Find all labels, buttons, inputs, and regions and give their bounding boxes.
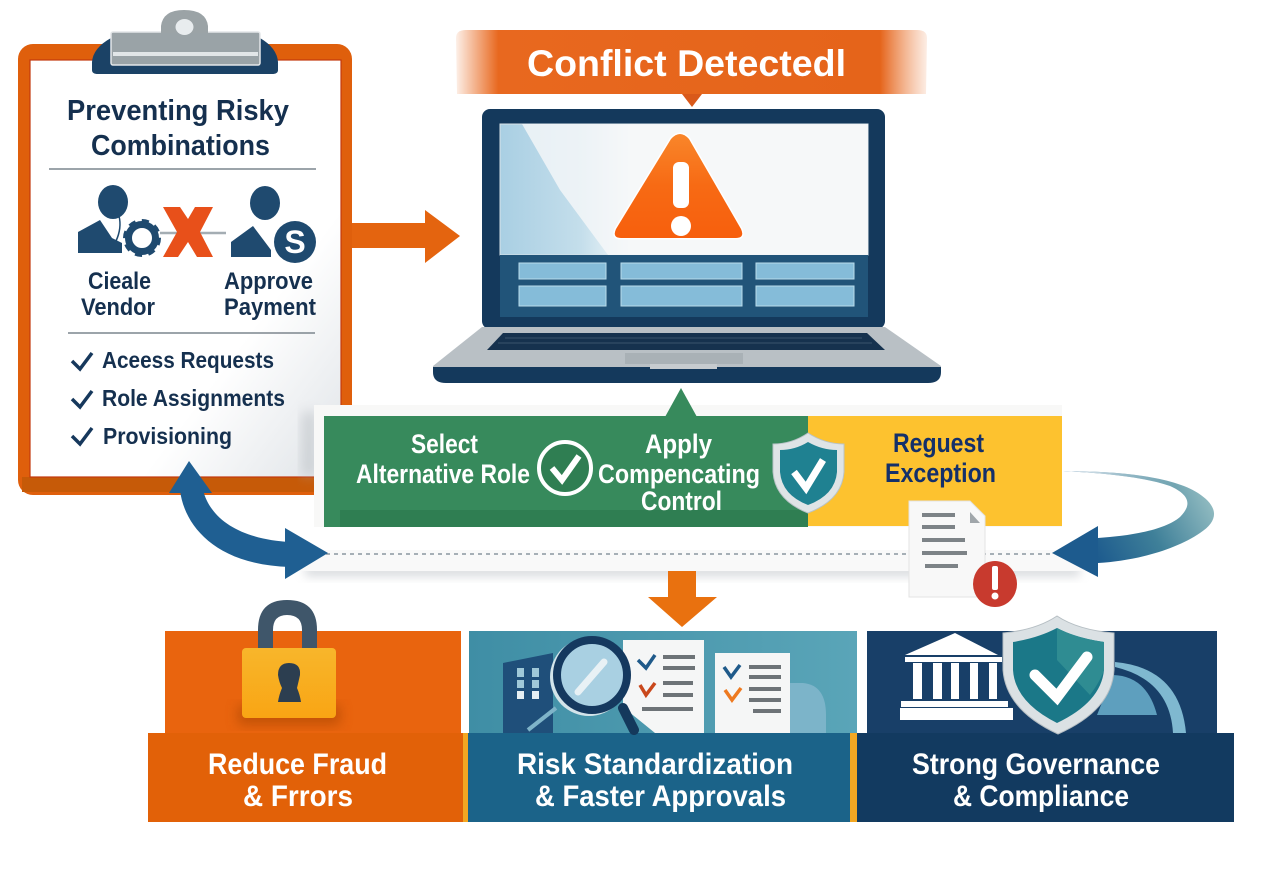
- option: green choices: Compencating: [598, 459, 760, 489]
- option: green choices: Control: [641, 486, 722, 516]
- option: request exception: Exception: [885, 458, 996, 488]
- screen cells: [519, 263, 854, 306]
- icon: small arch: [788, 683, 826, 733]
- option: green choices: Select: [411, 429, 478, 459]
- heading: preventing risky combinations: Preventing Risky: [67, 95, 289, 127]
- icon: document with alert: [909, 501, 1017, 607]
- text: risk standardization: [517, 748, 793, 813]
- option: request exception: Reguest: [893, 428, 984, 458]
- icon: dome: [1097, 675, 1157, 715]
- icon: magnifying glass: [550, 638, 634, 730]
- text: risk standardization: Risk Standardization: [517, 748, 793, 781]
- arrow: clipboard to laptop: [352, 210, 460, 263]
- text: strong governance: & Compliance: [953, 780, 1129, 813]
- option: green choices: [324, 416, 808, 527]
- panel: clipboard: [18, 10, 352, 495]
- checklist: [72, 347, 285, 449]
- heading: preventing risky combinations: Combinations: [91, 130, 270, 162]
- text: create vendor label: Cieale: [88, 268, 151, 295]
- icon: government building: [900, 633, 1013, 720]
- icon: large shield: [1003, 616, 1114, 734]
- checklist: Role Assignments: [102, 385, 285, 411]
- text: create vendor label: Vendor: [81, 294, 155, 321]
- option: green choices: Apply: [645, 429, 712, 459]
- panel: white strip with dashed line: [300, 550, 1085, 576]
- option: green choices: Alternative Role: [356, 459, 530, 489]
- icon: checklist document one: [623, 640, 704, 733]
- icon: conflict cross: [160, 207, 226, 257]
- icon: checklist document two: [715, 653, 790, 733]
- accent: yellow separators: [463, 733, 857, 822]
- checklist: Aceess Requests: [102, 347, 274, 373]
- option: request exception: [808, 416, 1062, 526]
- panel: reduce fraud: [148, 600, 463, 822]
- banner: conflict detected: [456, 30, 927, 107]
- icon: padlock: [238, 600, 340, 725]
- text: reduce fraud: & Frrors: [243, 780, 353, 813]
- icon: approve payment person with coin: S: [284, 224, 306, 260]
- heading: preventing risky combinations: [67, 95, 289, 162]
- text: reduce fraud: Reduce Fraud: [208, 748, 387, 781]
- icon: clipboard clip: [92, 10, 278, 74]
- text: strong governance: [912, 748, 1160, 813]
- banner: conflict detected: Conflict Detectedl: [527, 43, 846, 84]
- text: approve payment label: [224, 268, 316, 321]
- panel: risk standardization: [463, 631, 857, 822]
- panel: options: [302, 405, 1062, 527]
- arrow: laptop to options: [665, 388, 697, 417]
- text: risk standardization: & Faster Approvals: [535, 780, 786, 813]
- text: reduce fraud: [208, 748, 387, 813]
- text: approve payment label: Payment: [224, 294, 316, 321]
- icon: approve payment person with coin: [231, 186, 316, 263]
- icon: building: [503, 653, 556, 733]
- icon: laptop: [433, 109, 941, 383]
- icon: warning triangle: [615, 134, 742, 238]
- arrow: down to outcomes: [648, 571, 717, 627]
- arrow: left loop to clipboard: [169, 461, 328, 579]
- text: strong governance: Strong Governance: [912, 748, 1160, 781]
- icon: teal shield: [773, 433, 844, 513]
- text: create vendor label: [81, 268, 155, 321]
- panel: strong governance: [857, 616, 1234, 822]
- checklist: Provisioning: [103, 423, 232, 449]
- arrow: right swoosh from exception: [1052, 471, 1214, 577]
- icon: create vendor person with gear: [78, 185, 159, 255]
- icon: check circle: [539, 442, 591, 494]
- text: approve payment label: Approve: [224, 268, 313, 295]
